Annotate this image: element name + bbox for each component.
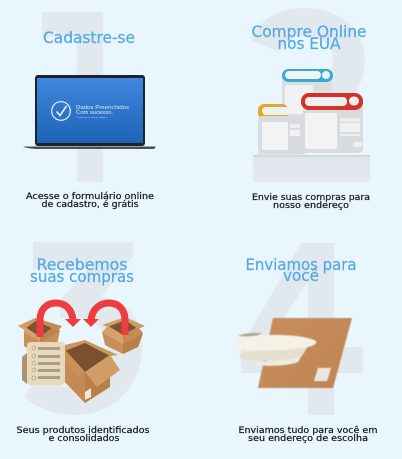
left box xyxy=(18,318,62,356)
heading: Enviamos para você: você xyxy=(283,266,319,285)
heading: Compre Online nos EUA: nos EUA xyxy=(278,34,341,53)
heading: Compre Online nos EUA: Compre Online xyxy=(252,22,366,41)
caption: step 2: Envie suas compras para xyxy=(252,192,370,203)
caption: step 4: Enviamos tudo para você em xyxy=(238,425,378,436)
icon: boxes with arrows xyxy=(18,303,145,403)
centre box xyxy=(58,340,120,403)
icon: laptop: Com sucesso. xyxy=(76,110,113,116)
icon: laptop: Conheça a nossa agora xyxy=(76,117,108,119)
icon: checklist xyxy=(22,342,65,385)
icon: flying parcel xyxy=(235,318,352,388)
heading: Enviamos para você: Enviamos para xyxy=(246,255,356,274)
caption: step 3: Seus produtos identificados xyxy=(16,425,150,436)
caption: step 2: nosso endereço xyxy=(273,200,349,211)
panel: step 2 xyxy=(252,8,370,211)
caption: step 1: Acesse o formulário online xyxy=(26,191,154,202)
heading: Cadastre-se: Cadastre-se xyxy=(43,28,135,47)
right box xyxy=(102,317,145,354)
icon: laptop xyxy=(23,75,156,149)
arrow: right box to centre xyxy=(91,303,125,335)
big number 4 xyxy=(241,243,363,415)
big number 3 xyxy=(25,242,142,415)
caption: step 4: seu endereço de escolha xyxy=(248,433,368,444)
big number 2 xyxy=(252,8,370,182)
heading: Recebemos suas compras: Recebemos xyxy=(36,255,128,274)
panel: step 1 xyxy=(23,12,156,210)
icon: laptop: Dados Preenchidos xyxy=(76,105,129,111)
heading: Recebemos suas compras: suas compras xyxy=(30,267,134,286)
caption: step 1: de cadastro, é grátis xyxy=(42,199,139,210)
panel: step 3 xyxy=(16,242,150,444)
caption: step 3: e consolidados xyxy=(48,433,120,444)
arrow: left box to centre xyxy=(40,303,73,337)
big number 1 xyxy=(42,12,103,182)
icon: browser windows xyxy=(253,69,370,182)
panel: step 4 xyxy=(235,243,378,444)
